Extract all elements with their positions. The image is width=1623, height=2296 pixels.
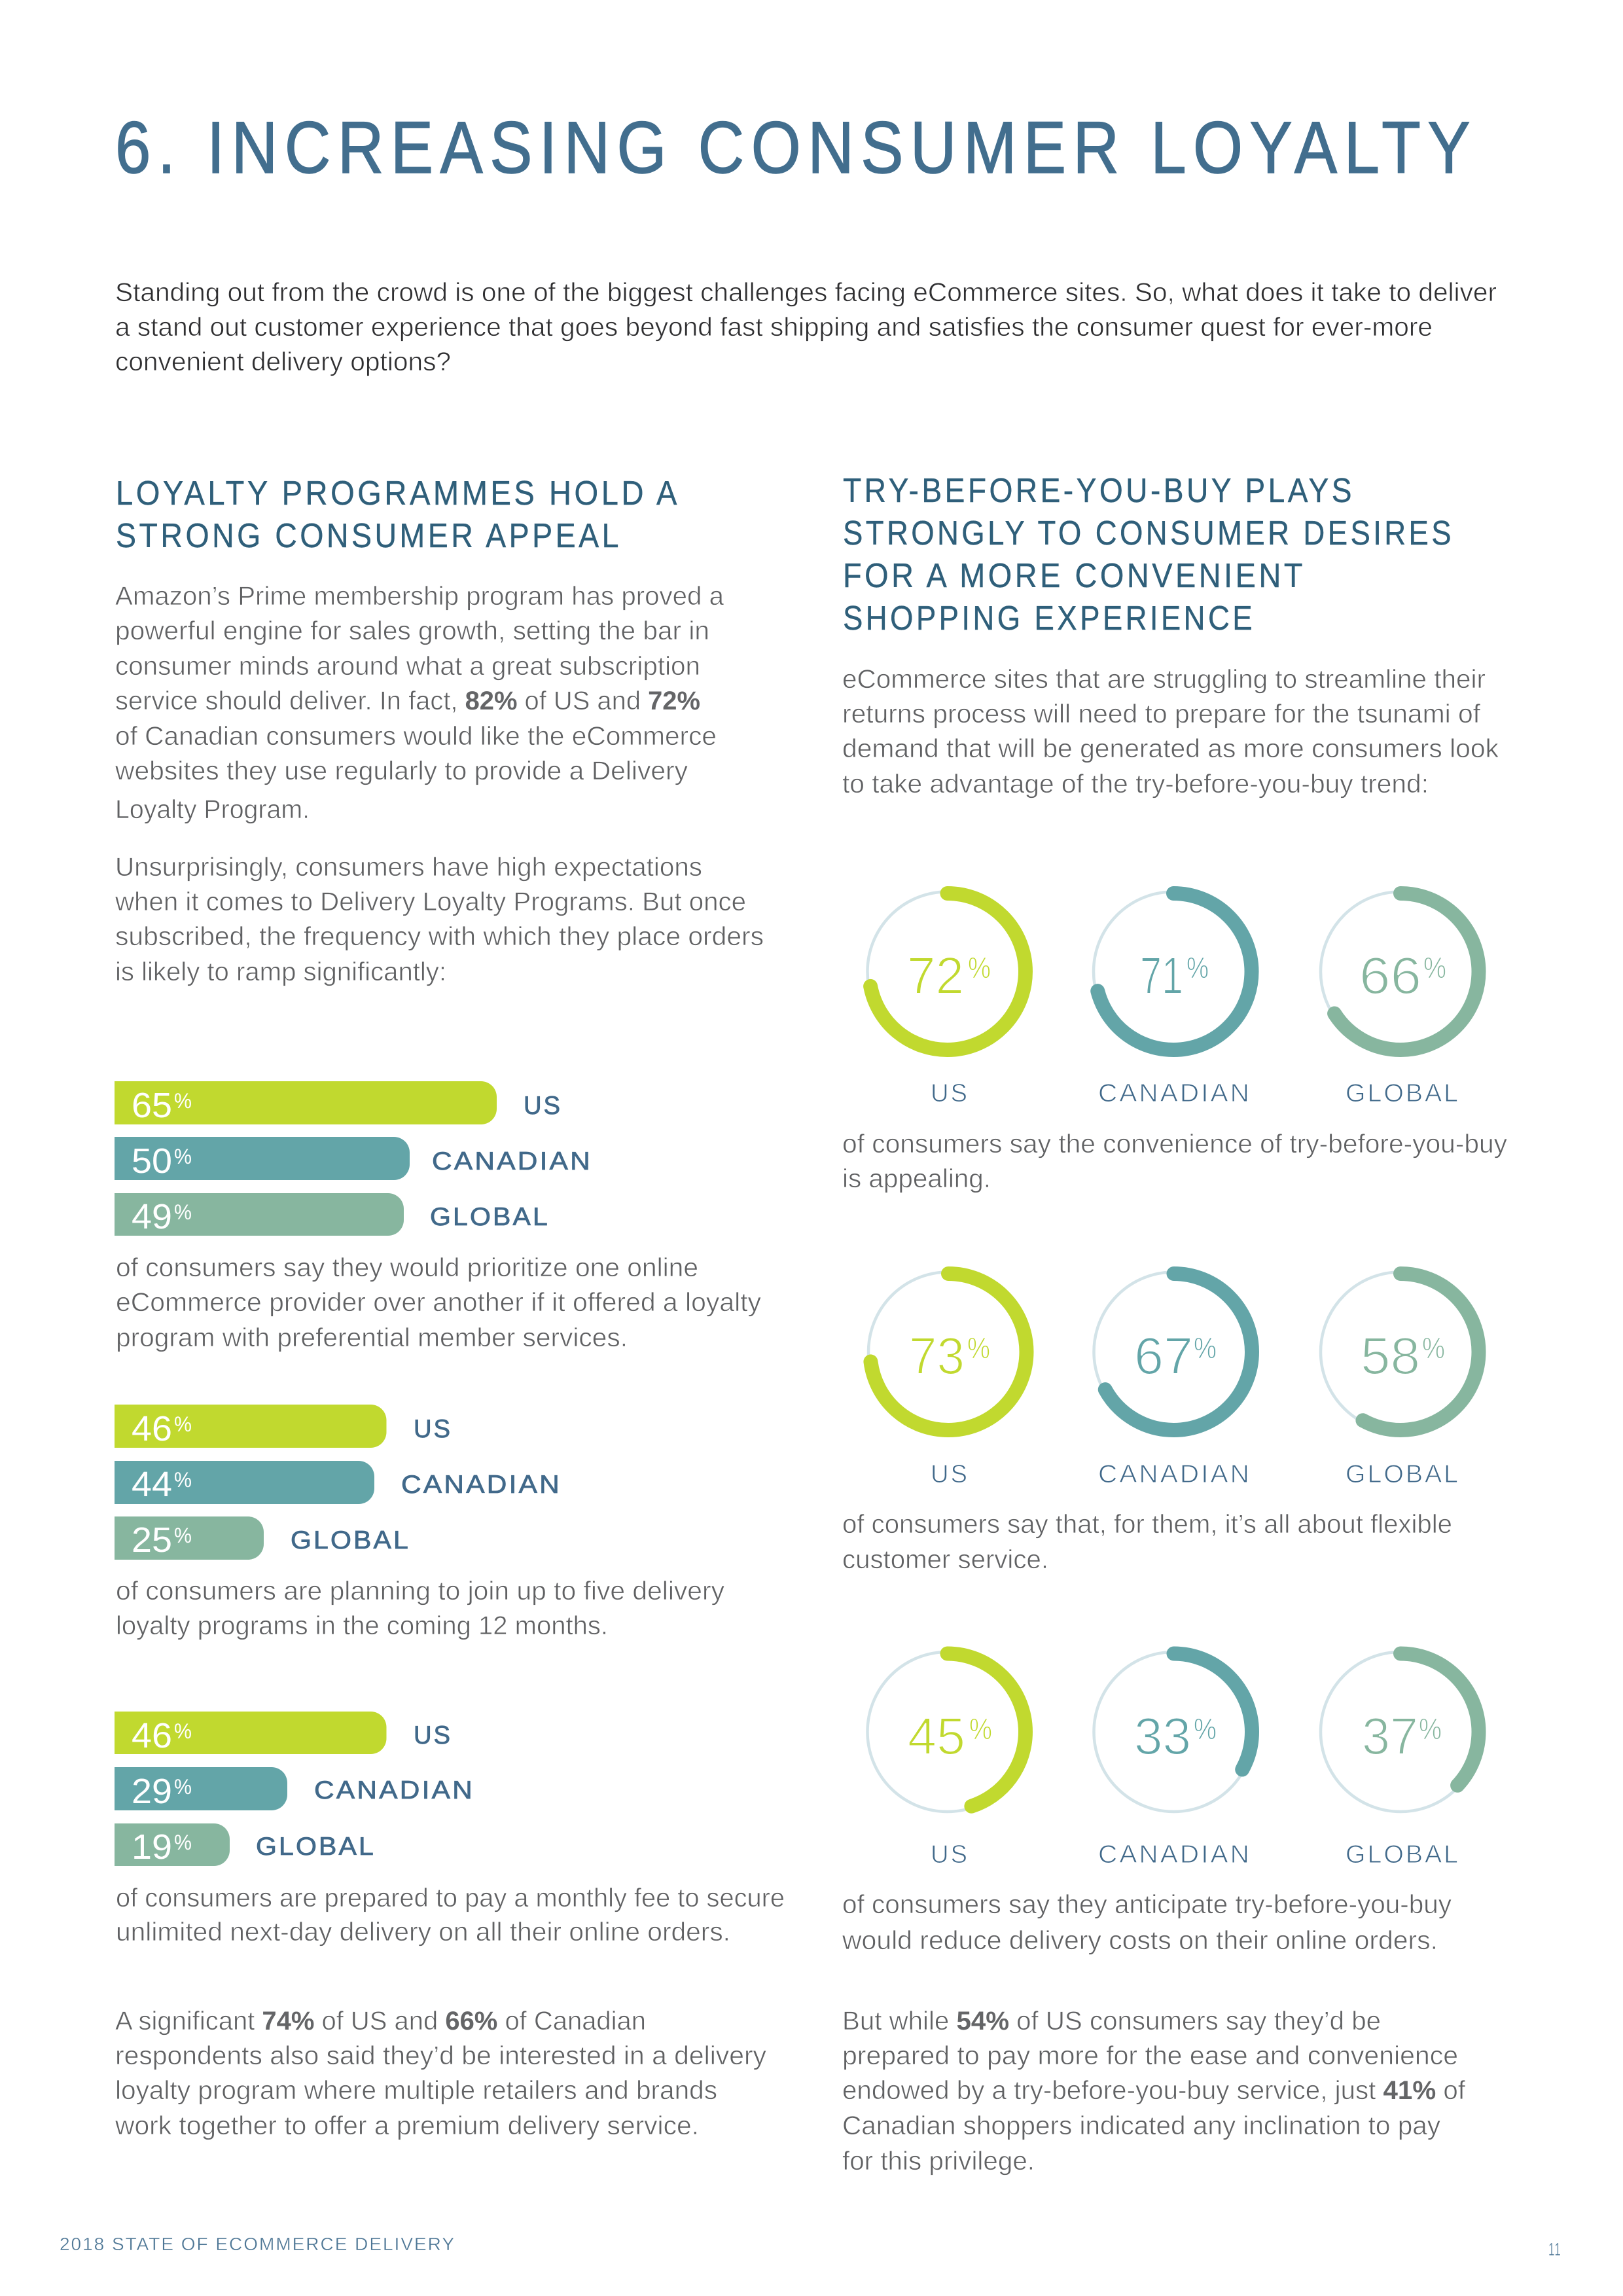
caption: flexible service: of consumers say that, for them, it’s all about flexible xyxy=(842,1510,1452,1539)
donut: Canadian 67%: 67 xyxy=(1134,1327,1193,1385)
bar: US 46%: 46 xyxy=(132,1716,172,1755)
page number: 11 xyxy=(1548,2239,1561,2259)
bar: Canadian 29% xyxy=(115,1767,474,1811)
donut: Canadian 71%: % xyxy=(1186,951,1209,984)
donut row: reduce delivery costs xyxy=(868,1652,1480,1869)
text block: Amazon Prime xyxy=(115,582,724,824)
text block: pay more: But while 54% of US consumers say they’d be xyxy=(842,2007,1381,2036)
bar: US 46% xyxy=(115,1405,452,1448)
donut: US 72%: US xyxy=(931,1079,969,1107)
donut: Global 58% xyxy=(1321,1272,1480,1488)
caption: convenience: of consumers say the convenience of try-before-you-buy xyxy=(842,1130,1507,1158)
bar: US 46%: US xyxy=(414,1721,452,1749)
bar: Canadian 44% xyxy=(115,1461,562,1504)
text block: high expectations: when it comes to Delivery Loyalty Programs. But once xyxy=(115,888,746,916)
donut: Global 66%: % xyxy=(1423,951,1446,984)
donut: US 72% xyxy=(868,891,1027,1107)
intro text xyxy=(115,278,1497,376)
text block: pay more: endowed by a try-before-you-buy service, just 41% of xyxy=(842,2076,1466,2105)
donut: Global 66%: GLOBAL xyxy=(1346,1079,1460,1107)
caption: prioritize provider: eCommerce provider over another if it offered a loyalty xyxy=(116,1288,761,1317)
caption: monthly fee xyxy=(116,1884,785,1946)
caption: prioritize provider: program with preferential member services. xyxy=(116,1323,628,1352)
donut: Global 37% xyxy=(1321,1652,1480,1869)
donut row: convenience xyxy=(868,891,1480,1107)
text block: premium delivery: respondents also said they’d be interested in a delivery xyxy=(115,2041,766,2070)
donut: Global 58%: % xyxy=(1422,1331,1445,1365)
text block: premium delivery: loyalty program where multiple retailers and brands xyxy=(115,2076,717,2105)
text block: pay more: prepared to pay more for the ease and convenience xyxy=(842,2041,1458,2070)
caption: prioritize provider xyxy=(116,1253,761,1352)
intro text: a stand out customer experience that goes beyond fast shipping and satisfies the consumer quest for ever-more xyxy=(115,313,1433,342)
donut row: flexible service xyxy=(868,1272,1480,1488)
footer: 2018 STATE OF ECOMMERCE DELIVERY xyxy=(60,2234,455,2254)
text block: Amazon Prime: websites they use regularly to provide a Delivery xyxy=(115,757,688,785)
bar: Global 19%: GLOBAL xyxy=(256,1833,376,1861)
bar: Global 49%: 49 xyxy=(132,1197,172,1236)
donut: US 72%: 72 xyxy=(907,946,964,1005)
text block: premium delivery: work together to offer a premium delivery service. xyxy=(115,2111,699,2140)
bar: Canadian 29%: CANADIAN xyxy=(314,1776,474,1804)
caption: monthly fee: unlimited next-day delivery on all their online orders. xyxy=(116,1918,730,1946)
text block: Amazon Prime: Loyalty Program. xyxy=(115,795,310,824)
donut: Canadian 67% xyxy=(1094,1272,1254,1488)
donut: Canadian 33%: % xyxy=(1194,1712,1217,1746)
bar: US 65% xyxy=(115,1081,562,1125)
text block: returns tsunami: to take advantage of the try-before-you-buy trend: xyxy=(842,770,1429,798)
donut: Global 37%: GLOBAL xyxy=(1346,1840,1460,1869)
bar: Canadian 50%: 50 xyxy=(132,1141,172,1181)
text block: pay more: Canadian shoppers indicated any inclination to pay xyxy=(842,2111,1440,2140)
bar: Canadian 50% xyxy=(115,1137,592,1181)
heading: loyalty programmes: STRONG CONSUMER APPEAL xyxy=(116,517,622,555)
caption: reduce delivery costs: would reduce delivery costs on their online orders. xyxy=(842,1926,1438,1955)
text block: high expectations: subscribed, the frequency with which they place orders xyxy=(115,922,764,951)
text block: pay more xyxy=(842,2007,1466,2176)
donut: US 73%: 73 xyxy=(909,1327,965,1385)
text block: pay more: for this privilege. xyxy=(842,2147,1035,2176)
donut: US 72%: % xyxy=(968,951,991,984)
bar: Global 49%: % xyxy=(174,1200,192,1224)
bar: Global 19% xyxy=(115,1823,376,1867)
panel: loyalty programmes column xyxy=(115,475,785,2140)
bar chart: join five programs xyxy=(115,1405,562,1560)
bar: Canadian 44%: CANADIAN xyxy=(401,1471,562,1499)
text block: high expectations: is likely to ramp significantly: xyxy=(115,958,446,986)
donut: Global 66% xyxy=(1321,891,1480,1107)
bar: US 46%: % xyxy=(174,1719,192,1743)
donut: Canadian 71%: CANADIAN xyxy=(1098,1079,1251,1107)
heading: loyalty programmes xyxy=(116,475,680,555)
bar chart: monthly fee xyxy=(115,1712,474,1867)
bar: Canadian 50%: CANADIAN xyxy=(432,1147,592,1175)
text block: returns tsunami: eCommerce sites that are struggling to streamline their xyxy=(842,665,1486,694)
donut: Canadian 33% xyxy=(1094,1652,1254,1869)
donut: US 45%: % xyxy=(969,1712,992,1746)
intro text: Standing out from the crowd is one of the biggest challenges facing eCommerce sites. So, what does it take to deliver xyxy=(115,278,1497,307)
bar: Global 49% xyxy=(115,1193,550,1236)
caption: flexible service xyxy=(842,1510,1452,1574)
caption: prioritize provider: of consumers say they would prioritize one online xyxy=(116,1253,698,1282)
heading: try-before-you-buy: STRONGLY TO CONSUMER DESIRES xyxy=(843,514,1454,552)
bar: US 46% xyxy=(115,1712,452,1755)
caption: flexible service: customer service. xyxy=(842,1545,1048,1574)
donut: US 45%: US xyxy=(931,1840,969,1869)
caption: convenience: is appealing. xyxy=(842,1164,991,1193)
text block: Amazon Prime: powerful engine for sales growth, setting the bar in xyxy=(115,617,709,645)
heading: try-before-you-buy xyxy=(843,472,1454,637)
caption: convenience xyxy=(842,1130,1507,1193)
donut: Global 66%: 66 xyxy=(1359,946,1421,1005)
donut: US 45% xyxy=(868,1652,1027,1869)
donut: US 45%: 45 xyxy=(908,1707,965,1765)
bar: Global 25%: GLOBAL xyxy=(291,1526,410,1554)
heading: loyalty programmes: LOYALTY PROGRAMMES HOLD A xyxy=(116,475,680,512)
text block: returns tsunami: returns process will need to prepare for the tsunami of xyxy=(842,700,1481,728)
panel: try-before-you-buy column xyxy=(842,472,1507,2176)
donut: Global 58%: 58 xyxy=(1361,1327,1420,1385)
bar: US 46%: % xyxy=(174,1412,192,1436)
bar: Global 25%: % xyxy=(174,1524,192,1547)
caption: join five programs xyxy=(116,1577,724,1640)
donut: Canadian 71%: 71 xyxy=(1140,946,1183,1005)
bar chart: prioritize provider xyxy=(115,1081,592,1236)
donut: Global 37%: % xyxy=(1419,1712,1442,1746)
text block: premium delivery: A significant 74% of US and 66% of Canadian xyxy=(115,2007,646,2036)
caption: reduce delivery costs: of consumers say they anticipate try-before-you-buy xyxy=(842,1890,1452,1919)
caption: join five programs: loyalty programs in the coming 12 months. xyxy=(116,1611,608,1640)
donut: US 73%: % xyxy=(967,1331,990,1365)
donut: Canadian 67%: % xyxy=(1194,1331,1217,1365)
donut: Canadian 33%: 33 xyxy=(1134,1707,1191,1765)
text block: premium delivery xyxy=(115,2007,766,2140)
heading: try-before-you-buy: SHOPPING EXPERIENCE xyxy=(843,600,1255,637)
text block: returns tsunami xyxy=(842,665,1499,798)
donut: Canadian 33%: CANADIAN xyxy=(1098,1840,1251,1869)
donut: Canadian 67%: CANADIAN xyxy=(1098,1460,1251,1488)
donut: Global 37%: 37 xyxy=(1362,1707,1418,1765)
bar: US 65%: US xyxy=(524,1092,562,1120)
text block: Amazon Prime: Amazon’s Prime membership program has proved a xyxy=(115,582,724,611)
text block: Amazon Prime: of Canadian consumers would like the eCommerce xyxy=(115,722,717,751)
donut: US 73% xyxy=(868,1272,1028,1488)
donut: Global 58%: GLOBAL xyxy=(1346,1460,1460,1488)
bar: Global 25%: 25 xyxy=(132,1520,172,1560)
bar: Canadian 50%: % xyxy=(174,1145,192,1168)
bar: Canadian 44%: % xyxy=(174,1468,192,1492)
text block: high expectations: Unsurprisingly, consumers have high expectations xyxy=(115,853,702,882)
text block: returns tsunami: demand that will be generated as more consumers look xyxy=(842,734,1499,763)
donut: Canadian 71% xyxy=(1094,891,1253,1107)
heading: try-before-you-buy: FOR A MORE CONVENIENT xyxy=(843,557,1306,595)
bar: Global 49%: GLOBAL xyxy=(430,1203,550,1231)
caption: monthly fee: of consumers are prepared to pay a monthly fee to secure xyxy=(116,1884,785,1912)
bar: Global 19%: 19 xyxy=(132,1827,172,1867)
text block: high expectations xyxy=(115,853,764,986)
text block: Amazon Prime: consumer minds around what a great subscription xyxy=(115,652,700,681)
caption: reduce delivery costs xyxy=(842,1890,1452,1955)
heading: try-before-you-buy: TRY-BEFORE-YOU-BUY PLAYS xyxy=(843,472,1355,510)
intro text: convenient delivery options? xyxy=(115,348,451,376)
bar: Global 19%: % xyxy=(174,1831,192,1854)
bar: US 46%: US xyxy=(414,1415,452,1443)
bar: Canadian 29%: 29 xyxy=(132,1772,172,1811)
bar: US 65%: % xyxy=(174,1089,192,1113)
bar: Global 25% xyxy=(115,1516,410,1560)
caption: join five programs: of consumers are planning to join up to five delivery xyxy=(116,1577,724,1605)
donut: US 73%: US xyxy=(931,1460,969,1488)
bar: Canadian 44%: 44 xyxy=(132,1465,172,1504)
bar: US 46%: 46 xyxy=(132,1409,172,1448)
bar: Canadian 29%: % xyxy=(174,1775,192,1799)
text block: Amazon Prime: service should deliver. In fact, 82% of US and 72% xyxy=(115,687,700,715)
bar: US 65%: 65 xyxy=(132,1086,172,1125)
